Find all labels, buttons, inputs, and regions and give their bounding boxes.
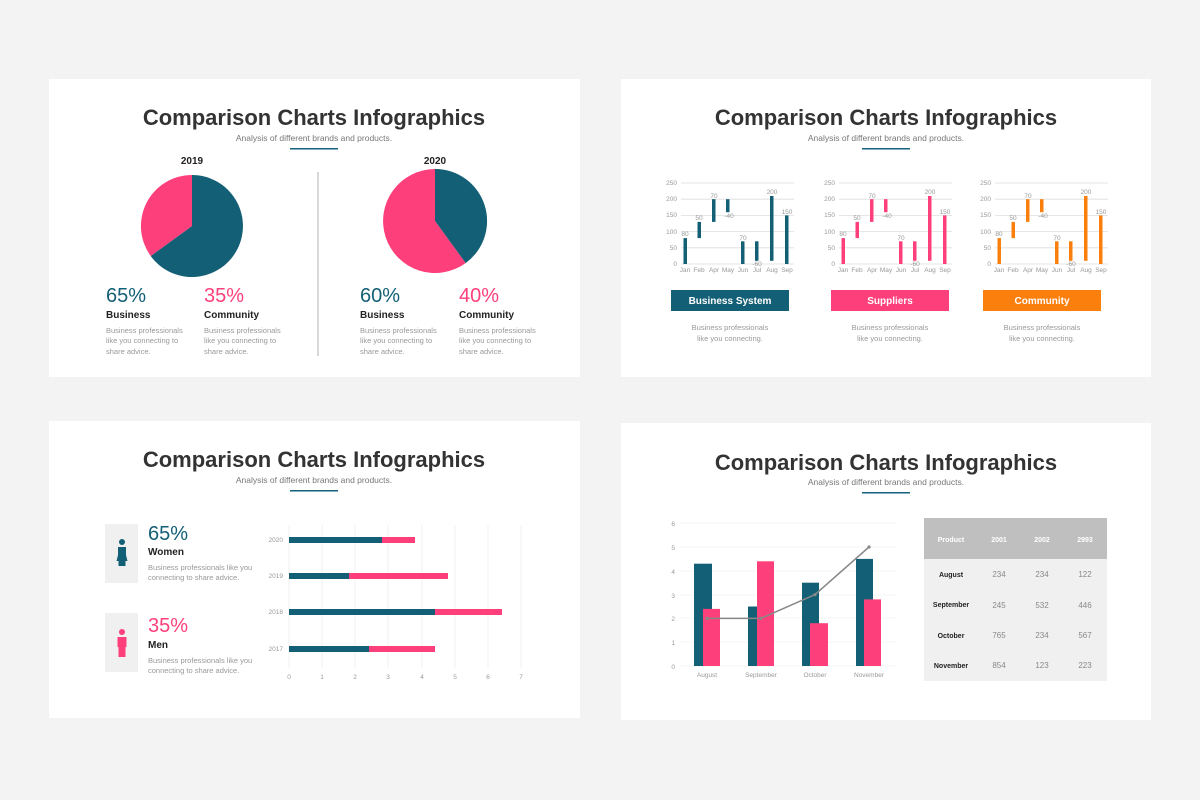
chart: suppliers: like you connecting. — [857, 334, 923, 343]
column chart: September — [745, 672, 778, 679]
panel: column chart and table — [621, 423, 1151, 720]
horizontal bar chart: 2019 — [269, 573, 283, 580]
data table: 446 — [1078, 601, 1092, 610]
data table: 532 — [1035, 601, 1049, 610]
stat: 2020 community: Community — [459, 310, 514, 321]
chart: business system: like you connecting. — [697, 334, 763, 343]
data table — [924, 518, 1107, 681]
stat: 2020 community: like you connecting to — [459, 336, 531, 345]
data table: October — [938, 633, 965, 640]
column chart: October — [803, 672, 827, 679]
data table: 854 — [992, 661, 1006, 670]
stat: 2020 community: share advice. — [459, 347, 504, 356]
horizontal bar chart: 2020 — [269, 537, 283, 544]
stat: men: 35% — [148, 615, 188, 637]
column chart: 0 — [671, 664, 675, 671]
horizontal bar chart: 0 — [287, 674, 291, 681]
data table: 122 — [1078, 570, 1092, 579]
data table: 2002 — [1034, 537, 1050, 544]
column chart: 1 — [671, 640, 675, 647]
column chart: August — [697, 672, 717, 679]
stat: 2020 business: like you connecting to — [360, 336, 432, 345]
stat: 2020 business: Business — [360, 310, 405, 321]
chart: business system: Business System — [689, 296, 772, 307]
panel: gender horizontal bars — [49, 421, 580, 718]
data table: September — [933, 602, 969, 609]
data table: 234 — [992, 570, 1006, 579]
stat: 2020 business: share advice. — [360, 347, 405, 356]
chart: suppliers: Business professionals — [852, 323, 929, 332]
subtitle: Analysis of different brands and products. — [808, 477, 964, 487]
data table: 567 — [1078, 631, 1092, 640]
stat: 2019 community: Business professionals — [204, 326, 281, 335]
chart: community: Community — [1014, 296, 1070, 307]
chart: suppliers — [824, 180, 952, 343]
data table: 223 — [1078, 661, 1092, 670]
stat: women: 65% — [148, 523, 188, 545]
stat: 2020 business: Business professionals — [360, 326, 437, 335]
icon: woman — [105, 524, 138, 583]
pie 2020: 2020 — [424, 156, 447, 167]
horizontal bar chart: 6 — [486, 674, 490, 681]
chart: community — [980, 180, 1108, 343]
column chart: 3 — [671, 593, 675, 600]
column chart — [671, 521, 896, 679]
stat: 2019 business — [106, 285, 183, 356]
chart: suppliers: Suppliers — [867, 296, 913, 307]
stat: 2019 community: 35% — [204, 285, 244, 307]
stat: 2019 community: share advice. — [204, 347, 249, 356]
data table: 234 — [1035, 631, 1049, 640]
stat: 2020 business: 60% — [360, 285, 400, 307]
column chart: 2 — [671, 616, 675, 623]
column chart: 4 — [671, 569, 675, 576]
title: Comparison Charts Infographics — [715, 450, 1057, 475]
column chart: 5 — [671, 545, 675, 552]
stat: men: Business professionals like you — [148, 656, 252, 665]
data table: 245 — [992, 601, 1006, 610]
title: Comparison Charts Infographics — [143, 447, 485, 472]
stat: women: Business professionals like you — [148, 563, 252, 572]
horizontal bar chart: 1 — [320, 674, 324, 681]
stat: women: Women — [148, 547, 184, 558]
data table: Product — [938, 537, 965, 544]
horizontal bar chart: 4 — [420, 674, 424, 681]
horizontal bar chart: 2017 — [269, 646, 283, 653]
horizontal bar chart: 2 — [353, 674, 357, 681]
data table: 765 — [992, 631, 1006, 640]
stat: 2020 community — [459, 285, 536, 356]
icon: man — [105, 613, 138, 672]
chart: community: Business professionals — [1004, 323, 1081, 332]
chart: business system — [666, 180, 794, 343]
subtitle: Analysis of different brands and products. — [236, 133, 392, 143]
data table: August — [939, 572, 964, 579]
column chart: 6 — [671, 521, 675, 528]
data table: November — [934, 663, 968, 670]
chart: business system: Business professionals — [692, 323, 769, 332]
stat: men — [148, 615, 252, 675]
stat: 2020 community: Business professionals — [459, 326, 536, 335]
stat: women — [148, 523, 252, 582]
panel: pie charts — [49, 79, 580, 377]
pie 2020 — [383, 156, 487, 273]
stat: women: connecting to share advice. — [148, 573, 239, 582]
column chart: November — [854, 672, 885, 679]
stat: 2019 business: 65% — [106, 285, 146, 307]
stat: 2020 community: 40% — [459, 285, 499, 307]
stat: 2019 business: Business professionals — [106, 326, 183, 335]
stat: 2020 business — [360, 285, 437, 356]
horizontal bar chart: 2018 — [269, 609, 283, 616]
pie 2019 — [141, 156, 243, 277]
stat: 2019 business: Business — [106, 310, 151, 321]
horizontal bar chart: 3 — [386, 674, 390, 681]
pie 2019: 2019 — [181, 156, 204, 167]
horizontal bar chart: 7 — [519, 674, 523, 681]
title: Comparison Charts Infographics — [143, 105, 485, 130]
panel: waterfall charts — [621, 79, 1151, 377]
chart: community: like you connecting. — [1009, 334, 1075, 343]
stat: 2019 community — [204, 285, 281, 356]
stat: 2019 business: share advice. — [106, 347, 151, 356]
data table: 2993 — [1077, 537, 1093, 544]
stat: 2019 community: Community — [204, 310, 259, 321]
data table: 123 — [1035, 661, 1049, 670]
stat: men: connecting to share advice. — [148, 666, 239, 675]
horizontal bar chart: 5 — [453, 674, 457, 681]
subtitle: Analysis of different brands and products. — [236, 475, 392, 485]
stat: men: Men — [148, 640, 168, 651]
stat: 2019 business: like you connecting to — [106, 336, 178, 345]
subtitle: Analysis of different brands and products. — [808, 133, 964, 143]
data table: 2001 — [991, 537, 1007, 544]
horizontal bar chart — [269, 525, 523, 681]
stat: 2019 community: like you connecting to — [204, 336, 276, 345]
title: Comparison Charts Infographics — [715, 105, 1057, 130]
data table: 234 — [1035, 570, 1049, 579]
